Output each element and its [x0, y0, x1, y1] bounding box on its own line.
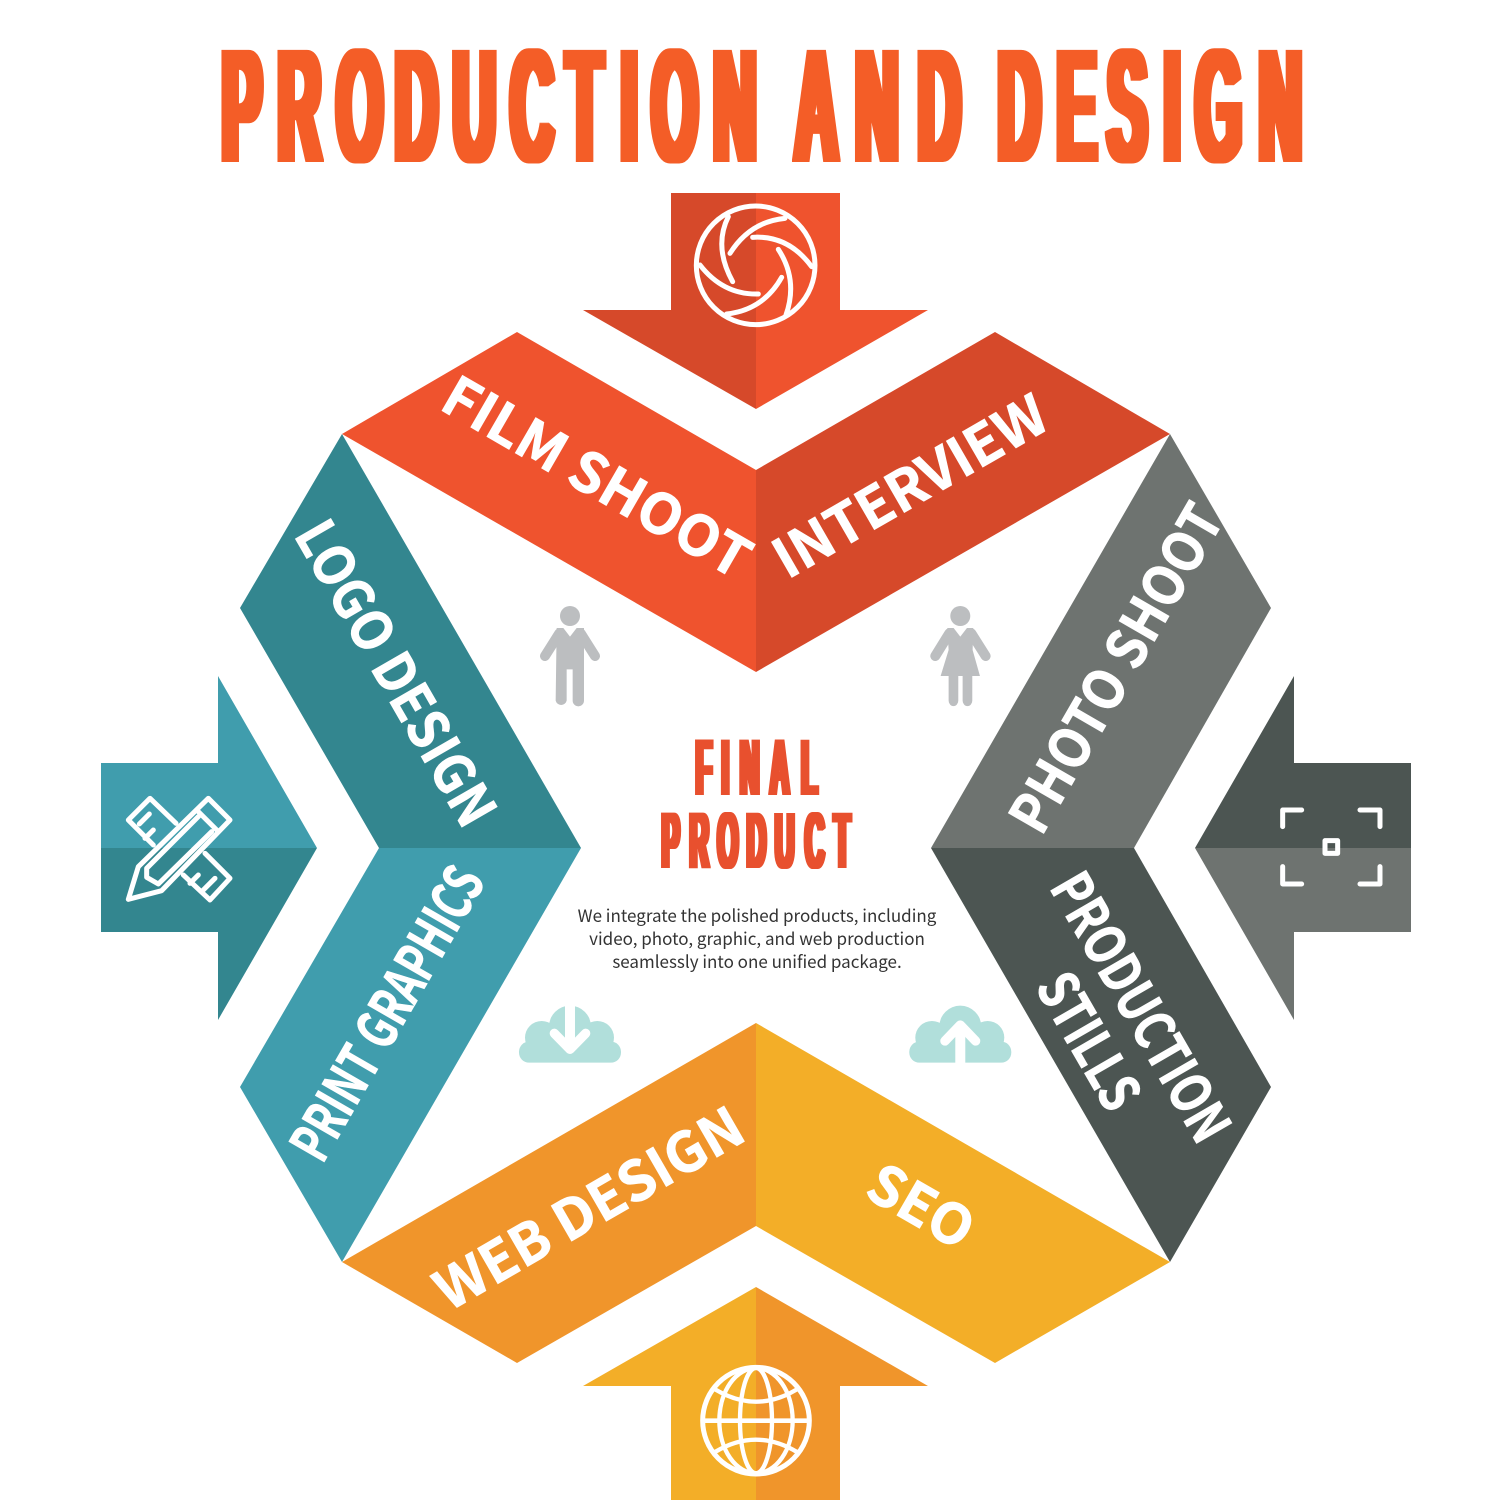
- panel: interview band: INTERVIEW: [755, 371, 1061, 594]
- text block: description: We integrate the polished products, including: [578, 902, 937, 927]
- panel: production stills band: STILLS: [1021, 955, 1164, 1123]
- heading: final product: FINAL: [696, 725, 818, 812]
- panel: logo design band: LOGO DESIGN: [279, 503, 520, 839]
- title: PRODUCTION AND DESIGN: [222, 16, 1302, 195]
- heading: final product: PRODUCT: [662, 798, 850, 885]
- icon: globe: [703, 1367, 809, 1474]
- panel: print graphics band: [240, 848, 581, 1262]
- heading: final product: [662, 725, 850, 885]
- panel: film shoot band: [342, 332, 768, 672]
- bottom arrow with globe icon: [583, 1287, 928, 1500]
- panel: interview band: [755, 332, 1170, 672]
- panel: production stills band: PRODUCTION: [1035, 855, 1254, 1155]
- icon: cloud upload: [909, 1006, 1011, 1063]
- panel: film shoot band: FILM SHOOT: [430, 353, 768, 594]
- panel: web design band: [342, 1023, 757, 1363]
- text block: description: video, photo, graphic, and web production: [589, 925, 925, 950]
- icon: woman: [935, 606, 986, 706]
- panel: photo shoot band: PHOTO SHOOT: [986, 487, 1239, 845]
- panel: logo design band: [240, 434, 581, 848]
- icon: man: [545, 606, 595, 706]
- top arrow with aperture icon: [583, 193, 928, 409]
- icon: pencil and ruler: [128, 798, 230, 900]
- icon: camera aperture: [696, 206, 815, 325]
- panel: seo band: SEO: [855, 1140, 991, 1265]
- left arrow with pencil and ruler icon: [101, 676, 317, 1020]
- panel: production stills band: [931, 848, 1271, 1262]
- right arrow with focus frame icon: [1195, 676, 1411, 1020]
- text block: description: [578, 902, 937, 973]
- text block: description: seamlessly into one unified package.: [612, 948, 902, 973]
- panel: print graphics band: PRINT GRAPHICS: [267, 849, 500, 1173]
- panel: seo band: [756, 1023, 1170, 1363]
- panel: web design band: WEB DESIGN: [417, 1083, 757, 1326]
- icon: camera focus frame: [1283, 810, 1380, 884]
- icon: cloud download: [519, 1000, 621, 1063]
